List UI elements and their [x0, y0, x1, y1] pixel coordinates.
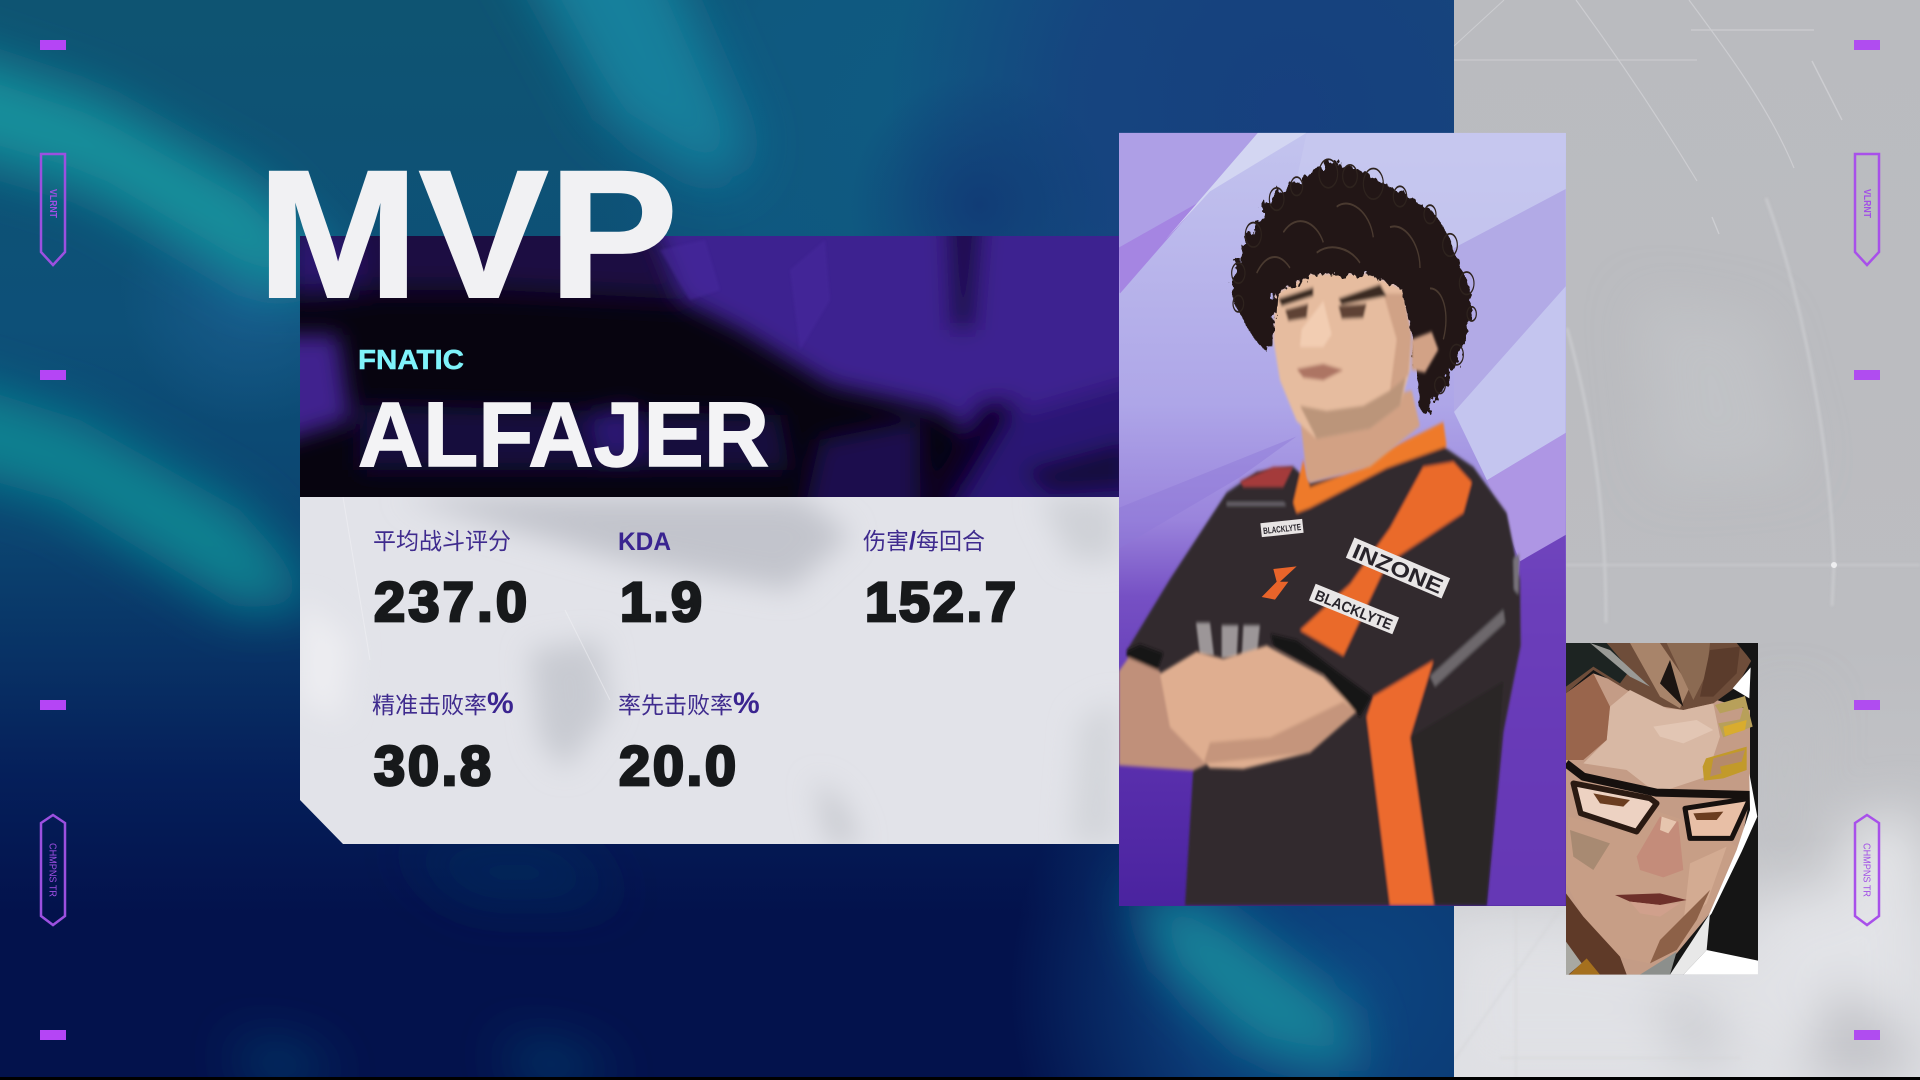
- player name: ALFAJER: ALFAJER: [358, 384, 769, 486]
- left rail ticks: [40, 40, 66, 1040]
- sleeve sponsor: BLACKLYTE: BLACKLYTE: [1312, 587, 1395, 634]
- left tag: CHMPNS TR: CHMPNS TR: [46, 843, 58, 897]
- left tag: VLRNT: [41, 154, 65, 265]
- player photo panel: [1119, 133, 1566, 906]
- agent portrait: [1566, 643, 1758, 975]
- agent left shade: [1566, 673, 1610, 760]
- card body: light stats panel: [300, 497, 1119, 844]
- sleeve sponsor: INZONE: INZONE: [1349, 540, 1446, 599]
- player jersey: [1127, 422, 1521, 906]
- stat: KDA: 1.9: [620, 570, 702, 633]
- arms: [1119, 634, 1372, 771]
- agent face base: [1566, 673, 1750, 975]
- stat: damage per round: [863, 527, 1016, 633]
- jersey side stripe: [1367, 661, 1434, 906]
- ear: [1412, 332, 1438, 373]
- right tag: VLRNT: [1855, 154, 1879, 265]
- chest sponsor: BLACKLYTE: [1260, 519, 1304, 537]
- team name: FNATIC: FNATIC: [358, 344, 464, 375]
- agent hair: [1566, 643, 1758, 710]
- card header: purple dark panel: [300, 236, 1119, 497]
- title: MVP: MVP: [257, 132, 678, 336]
- stat: average combat score: 237.0: [374, 570, 527, 633]
- stat: headshot kill rate: 30.8: [374, 734, 491, 797]
- chest sponsor: BLACKLYTE: BLACKLYTE: [1263, 522, 1302, 536]
- stat: first kill rate: 率先击败率%: [618, 687, 760, 720]
- stat: damage per round: 152.7: [865, 570, 1016, 633]
- agent nose: [1637, 817, 1683, 877]
- agent lips: [1615, 893, 1687, 905]
- sleeve sponsor: INZONE: [1345, 538, 1450, 600]
- stat: average combat score: 平均战斗评分: [373, 528, 511, 554]
- stat: headshot kill rate: 精准击败率%: [372, 687, 514, 720]
- right tag: CHMPNS TR: [1855, 815, 1879, 925]
- chest print: [1196, 623, 1260, 658]
- jersey collar: [1293, 422, 1447, 513]
- background: blue teal abstract: [0, 0, 1454, 1077]
- agent glasses: [1566, 763, 1752, 838]
- left tag: VLRNT: VLRNT: [47, 189, 58, 218]
- stat: damage per round: 伤害/每回合: [863, 527, 985, 555]
- left tag: CHMPNS TR: [41, 815, 65, 925]
- stat: headshot kill rate: [372, 687, 514, 797]
- jersey orange stripe: [1300, 462, 1472, 656]
- right tag: VLRNT: VLRNT: [1861, 189, 1872, 218]
- stat: KDA: KDA: [618, 528, 671, 556]
- hair: [1232, 159, 1476, 414]
- agent white rim and collar: [1566, 667, 1758, 975]
- right tag: CHMPNS TR: CHMPNS TR: [1860, 843, 1872, 897]
- stat: first kill rate: 20.0: [619, 734, 736, 797]
- neck and face: [1273, 273, 1420, 483]
- background: grey textured right panel: [1454, 0, 1920, 1077]
- stat: KDA: [618, 528, 702, 633]
- agent gold ornament: [1703, 696, 1753, 781]
- shoulder sponsor: [1240, 467, 1293, 487]
- photo background streaks: [1119, 133, 1566, 906]
- agent lower face: [1566, 810, 1737, 963]
- agent jaw shadow: [1566, 893, 1627, 975]
- stat: average combat score: [373, 528, 527, 633]
- right rail ticks: [1854, 40, 1880, 1040]
- fnatic crest: [1262, 566, 1297, 600]
- stat: first kill rate: [618, 687, 760, 797]
- agent forehead: [1583, 690, 1720, 793]
- scratches: [1454, 0, 1842, 234]
